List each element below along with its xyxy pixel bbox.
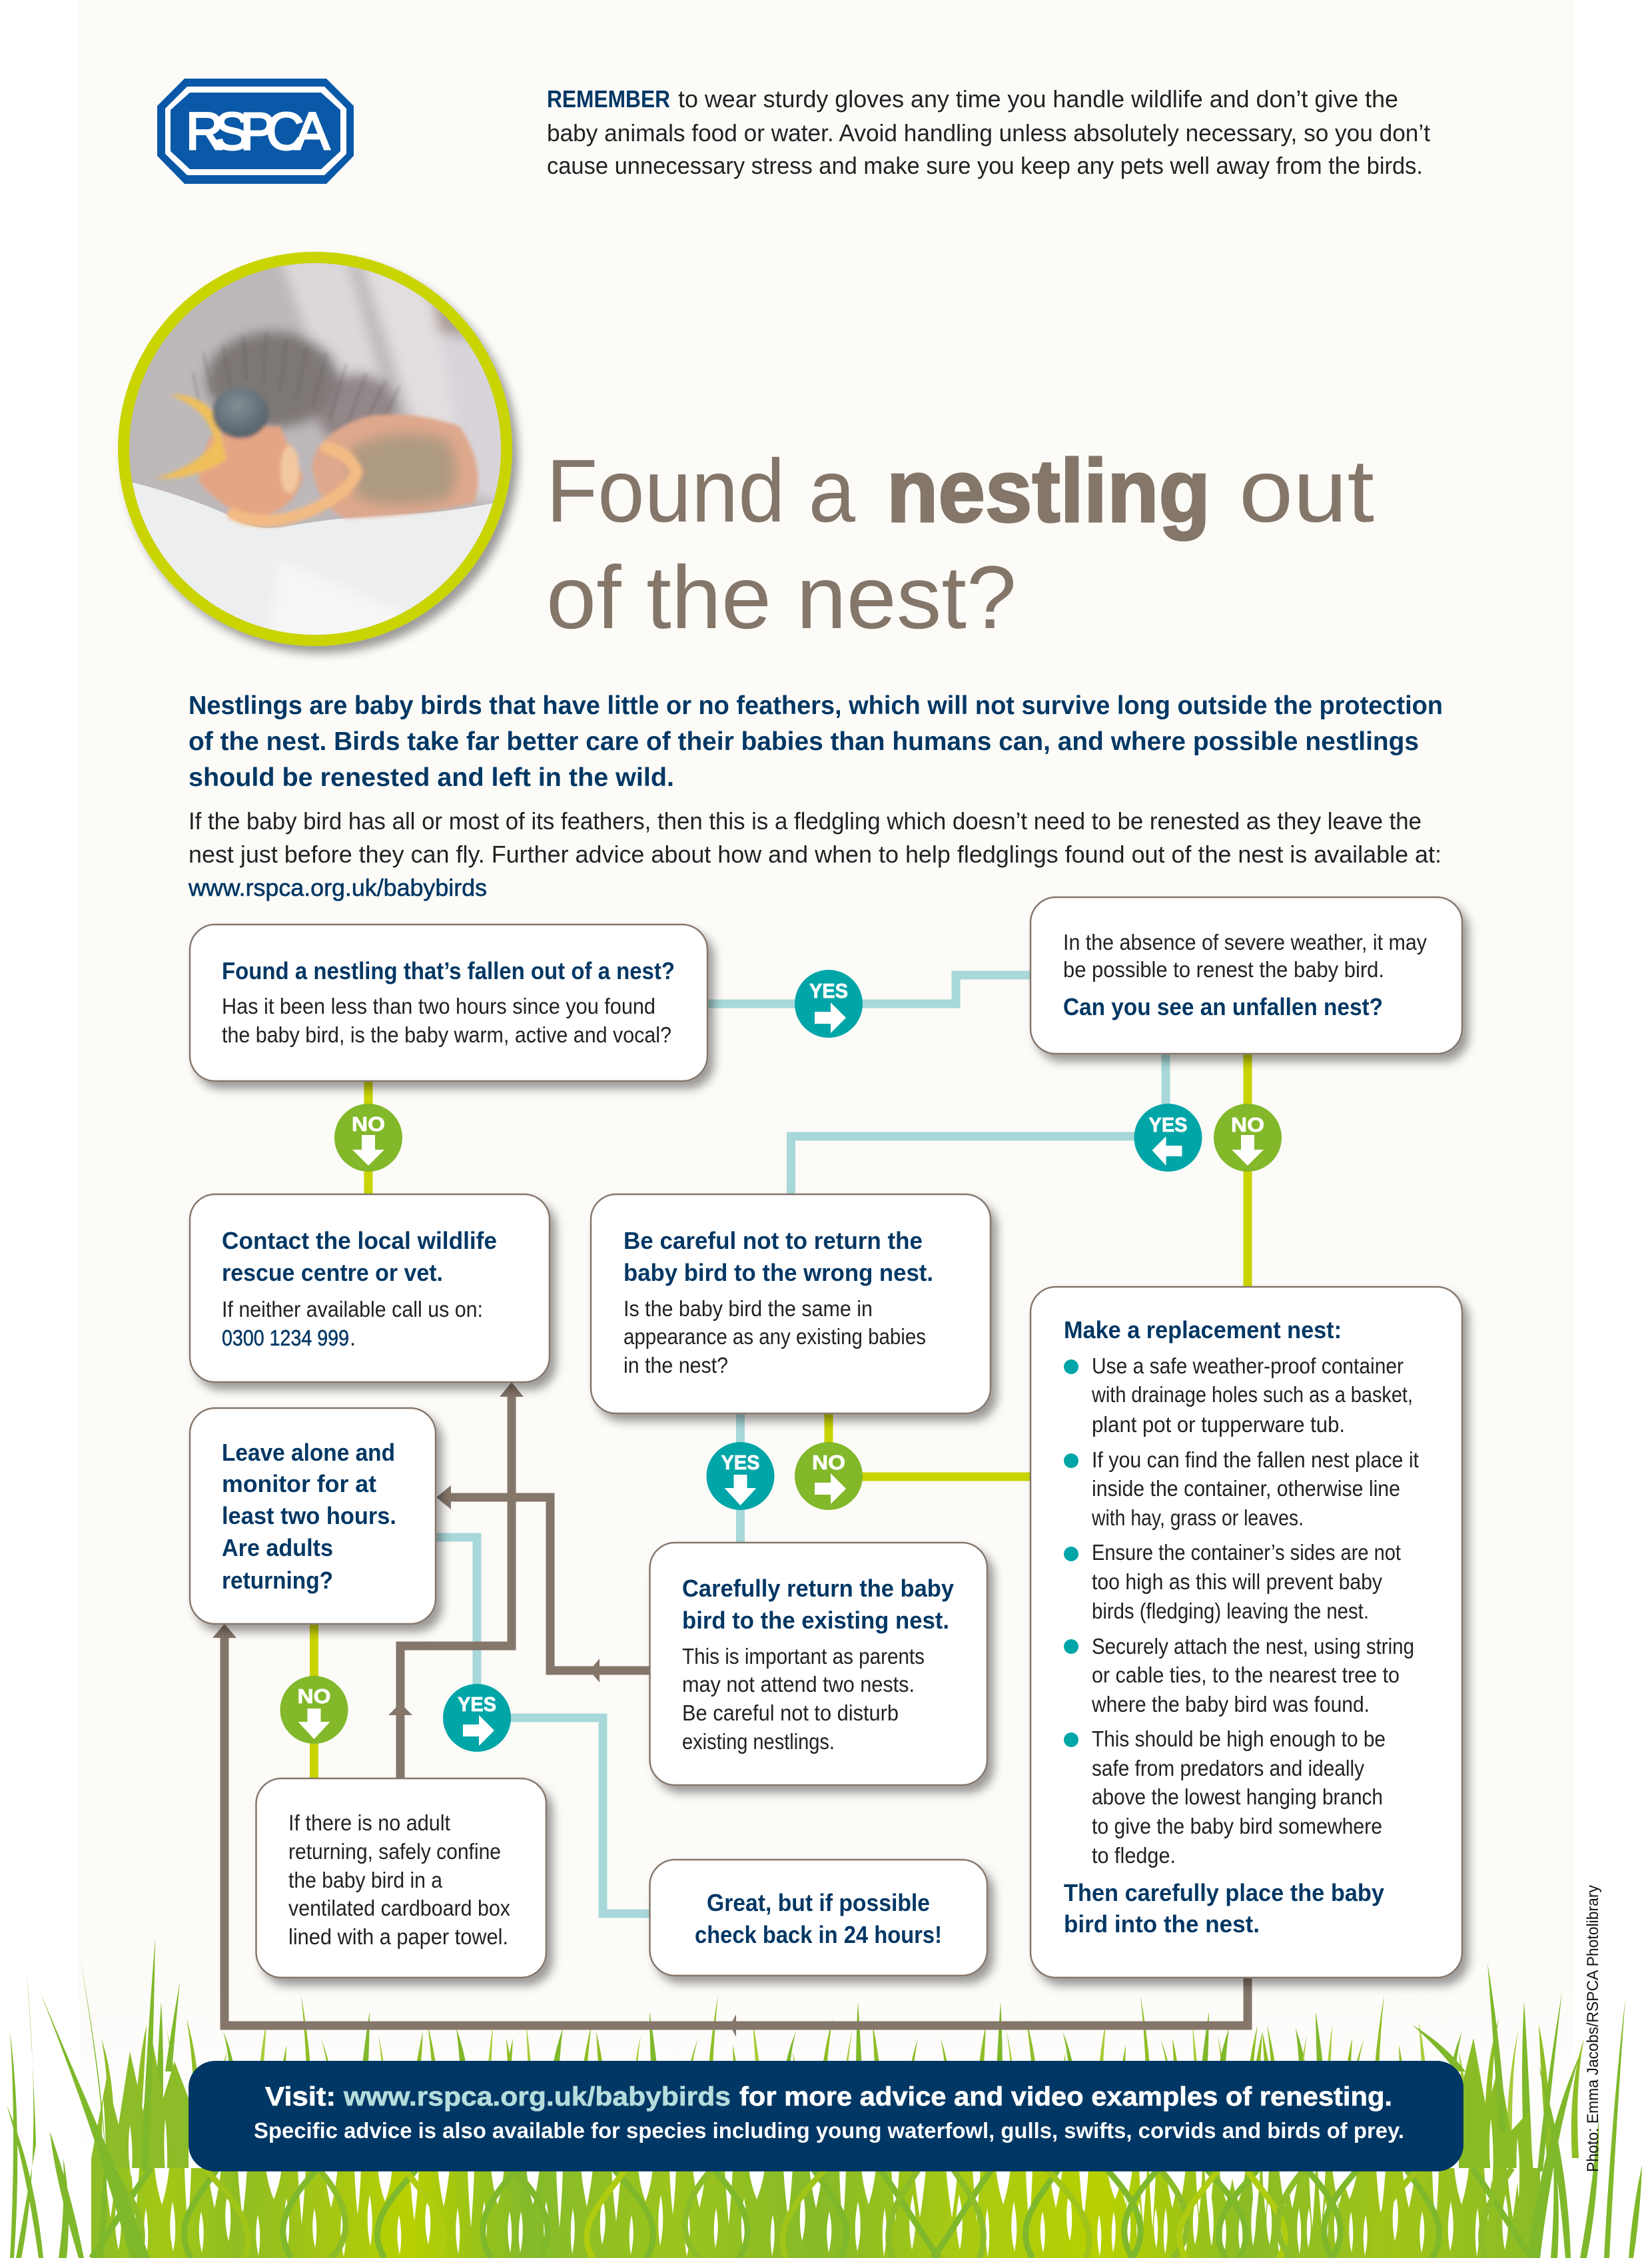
badge: yes down, same appearance: YES <box>721 1451 759 1474</box>
box: no adult returning: returning, safely confine <box>288 1839 501 1864</box>
box: make a replacement nest: Ensure the container’s sides are not <box>1092 1540 1401 1565</box>
intro fledgling text <box>188 807 1442 901</box>
box: make a replacement nest: where the baby bird was found. <box>1091 1692 1370 1716</box>
box: make a replacement nest: or cable ties, to the nearest tree to <box>1092 1663 1400 1687</box>
box: wrong nest warning: baby bird to the wrong nest. <box>623 1259 933 1286</box>
box: contact rescue centre: If neither available call us on: <box>222 1297 483 1321</box>
box: leave alone and monitor: Leave alone and <box>222 1439 395 1466</box>
badge: no down, unfallen nest <box>1214 1104 1282 1172</box>
box: no adult returning: lined with a paper towel. <box>288 1924 508 1949</box>
box: carefully return: Be careful not to disturb <box>682 1700 899 1725</box>
intro bold text: Nestlings are baby birds that have little or no feathers, which will not survive long outside the protection <box>189 691 1443 720</box>
intro bold text: should be renested and left in the wild. <box>189 763 674 792</box>
footer banner: Visit: <box>265 2082 336 2111</box>
box: make a replacement nest: above the lowest hanging branch <box>1092 1784 1383 1809</box>
box: contact rescue centre: 0300 1234 999 <box>222 1325 349 1350</box>
badge: yes right, first question <box>795 970 863 1038</box>
box: carefully return: This is important as parents <box>682 1644 925 1669</box>
box: found a nestling: the baby bird, is the baby warm, active and vocal? <box>222 1022 671 1047</box>
box: renest possible: be possible to renest the baby bird. <box>1063 957 1384 982</box>
box: leave alone and monitor: least two hours. <box>222 1502 396 1529</box>
intro fledgling text: If the baby bird has all or most of its feathers, then this is a fledgling which doesn’t need to be renested as they leave the <box>189 807 1422 835</box>
badge: no right, same appearance <box>795 1442 863 1510</box>
title: nestling <box>887 442 1210 541</box>
box: contact rescue centre: . <box>350 1325 356 1350</box>
box: no adult returning: If there is no adult <box>288 1810 450 1835</box>
box: make a replacement nest: bird into the nest. <box>1064 1910 1260 1938</box>
flow arrows: brown return paths <box>212 1382 1248 2037</box>
box: renest possible <box>1031 897 1462 1054</box>
box: carefully return: bird to the existing nest. <box>682 1607 949 1634</box>
footer banner: Specific advice is also available for species including young waterfowl, gulls, swifts, corvids and birds of prey. <box>254 2118 1404 2143</box>
box: renest possible: Can you see an unfallen nest? <box>1063 993 1383 1020</box>
title: out <box>1239 442 1374 541</box>
box: no adult returning: the baby bird in a <box>288 1868 443 1892</box>
box: make a replacement nest: to give the baby bird somewhere <box>1092 1814 1382 1838</box>
box: make a replacement nest: Make a replacement nest: <box>1064 1316 1342 1343</box>
title <box>546 442 1374 647</box>
remember note: REMEMBER <box>547 85 670 113</box>
box: carefully return <box>650 1543 987 1785</box>
badge: yes left, unfallen nest: YES <box>1148 1113 1187 1136</box>
footer banner: www.rspca.org.uk/babybirds <box>343 2082 731 2111</box>
box: found a nestling: Found a nestling that’s fallen out of a nest? <box>222 957 675 984</box>
badge: no right, same appearance: NO <box>812 1451 845 1474</box>
badge: yes right, adults returning: YES <box>458 1693 496 1716</box>
badge: no down, unfallen nest: NO <box>1231 1113 1264 1136</box>
photo: baby bird in circle <box>100 246 526 659</box>
box: found a nestling: Has it been less than two hours since you found <box>222 994 655 1018</box>
box: make a replacement nest: birds (fledging) leaving the nest. <box>1092 1599 1369 1623</box>
intro bold text: of the nest. Birds take far better care of their babies than humans can, and where possible nestlings <box>189 727 1419 756</box>
badge: yes down, same appearance <box>706 1442 774 1510</box>
grass border <box>7 1938 1642 2258</box>
box: make a replacement nest: with hay, grass or leaves. <box>1091 1505 1304 1530</box>
box: wrong nest warning: Is the baby bird the same in <box>623 1296 873 1321</box>
box: wrong nest warning: Be careful not to return the <box>623 1227 923 1254</box>
flow connector lines: lime no paths <box>314 1054 1248 1778</box>
box: make a replacement nest: If you can find the fallen nest place it <box>1092 1447 1419 1472</box>
box: renest possible: In the absence of severe weather, it may <box>1063 930 1427 954</box>
box: wrong nest warning: in the nest? <box>623 1353 728 1377</box>
box: no adult returning: ventilated cardboard box <box>288 1896 510 1920</box>
box: carefully return: Carefully return the baby <box>682 1575 954 1602</box>
badge: no down, first question: NO <box>352 1112 385 1136</box>
RSPCA logo <box>157 79 354 184</box>
box: great, check back: check back in 24 hours! <box>695 1921 942 1948</box>
box: leave alone and monitor: monitor for at <box>222 1470 376 1497</box>
box: make a replacement nest: plant pot or tupperware tub. <box>1092 1412 1345 1437</box>
box: carefully return: may not attend two nests. <box>682 1672 915 1696</box>
flow connector lines: blue yes paths <box>436 975 1166 1914</box>
box: leave alone and monitor: Are adults <box>222 1534 333 1561</box>
box: contact rescue centre <box>190 1194 550 1382</box>
badge: yes right, first question: YES <box>809 979 848 1002</box>
footer banner: for more advice and video examples of renesting. <box>739 2082 1392 2111</box>
box: make a replacement nest: inside the container, otherwise line <box>1092 1476 1400 1501</box>
badge: yes right, adults returning <box>443 1684 511 1752</box>
box: make a replacement nest: too high as this will prevent baby <box>1092 1569 1382 1594</box>
box: make a replacement nest: with drainage holes such as a basket, <box>1091 1382 1413 1407</box>
box: contact rescue centre: Contact the local wildlife <box>222 1227 497 1254</box>
intro fledgling text: nest just before they can fly. Further advice about how and when to help fledglings found out of the nest is available at: <box>189 841 1442 868</box>
box: make a replacement nest <box>1031 1287 1462 1978</box>
photo credit: Photo: Emma Jacobs/RSPCA Photolibrary <box>1584 1885 1602 2172</box>
remember note: to wear sturdy gloves any time you handle wildlife and don’t give the <box>678 85 1398 113</box>
badge: yes left, unfallen nest <box>1134 1104 1202 1172</box>
RSPCA logo: RSPCA <box>186 101 330 161</box>
intro fledgling text: www.rspca.org.uk/babybirds <box>188 874 487 901</box>
box: make a replacement nest: safe from predators and ideally <box>1092 1756 1364 1780</box>
box: wrong nest warning <box>591 1194 991 1413</box>
box: found a nestling <box>190 925 707 1081</box>
badge: no down, first question <box>334 1104 402 1172</box>
footer banner <box>189 2061 1463 2171</box>
intro bold text <box>189 691 1443 792</box>
title: of the nest? <box>546 548 1017 647</box>
box: no adult returning <box>256 1778 546 1978</box>
box: make a replacement nest: Then carefully place the baby <box>1064 1879 1384 1906</box>
box: great, check back <box>650 1860 987 1976</box>
title: Found a <box>546 442 855 541</box>
box: make a replacement nest: This should be high enough to be <box>1092 1726 1386 1751</box>
box: contact rescue centre: rescue centre or vet. <box>222 1259 443 1286</box>
box: wrong nest warning: appearance as any existing babies <box>623 1324 926 1349</box>
box: make a replacement nest: to fledge. <box>1092 1843 1176 1868</box>
remember note: cause unnecessary stress and make sure you keep any pets well away from the birds. <box>547 152 1423 179</box>
badge: no down, adults returning <box>280 1676 348 1744</box>
remember note: baby animals food or water. Avoid handling unless absolutely necessary, so you don’t <box>547 119 1430 147</box>
box: leave alone and monitor <box>190 1408 436 1624</box>
box: make a replacement nest: Securely attach the nest, using string <box>1092 1634 1414 1659</box>
box: great, check back: Great, but if possible <box>707 1889 930 1916</box>
box: carefully return: existing nestlings. <box>682 1729 835 1754</box>
box: make a replacement nest: Use a safe weather-proof container <box>1092 1353 1404 1378</box>
remember note <box>547 85 1430 179</box>
badge: no down, adults returning: NO <box>297 1685 331 1708</box>
box: leave alone and monitor: returning? <box>222 1567 333 1594</box>
